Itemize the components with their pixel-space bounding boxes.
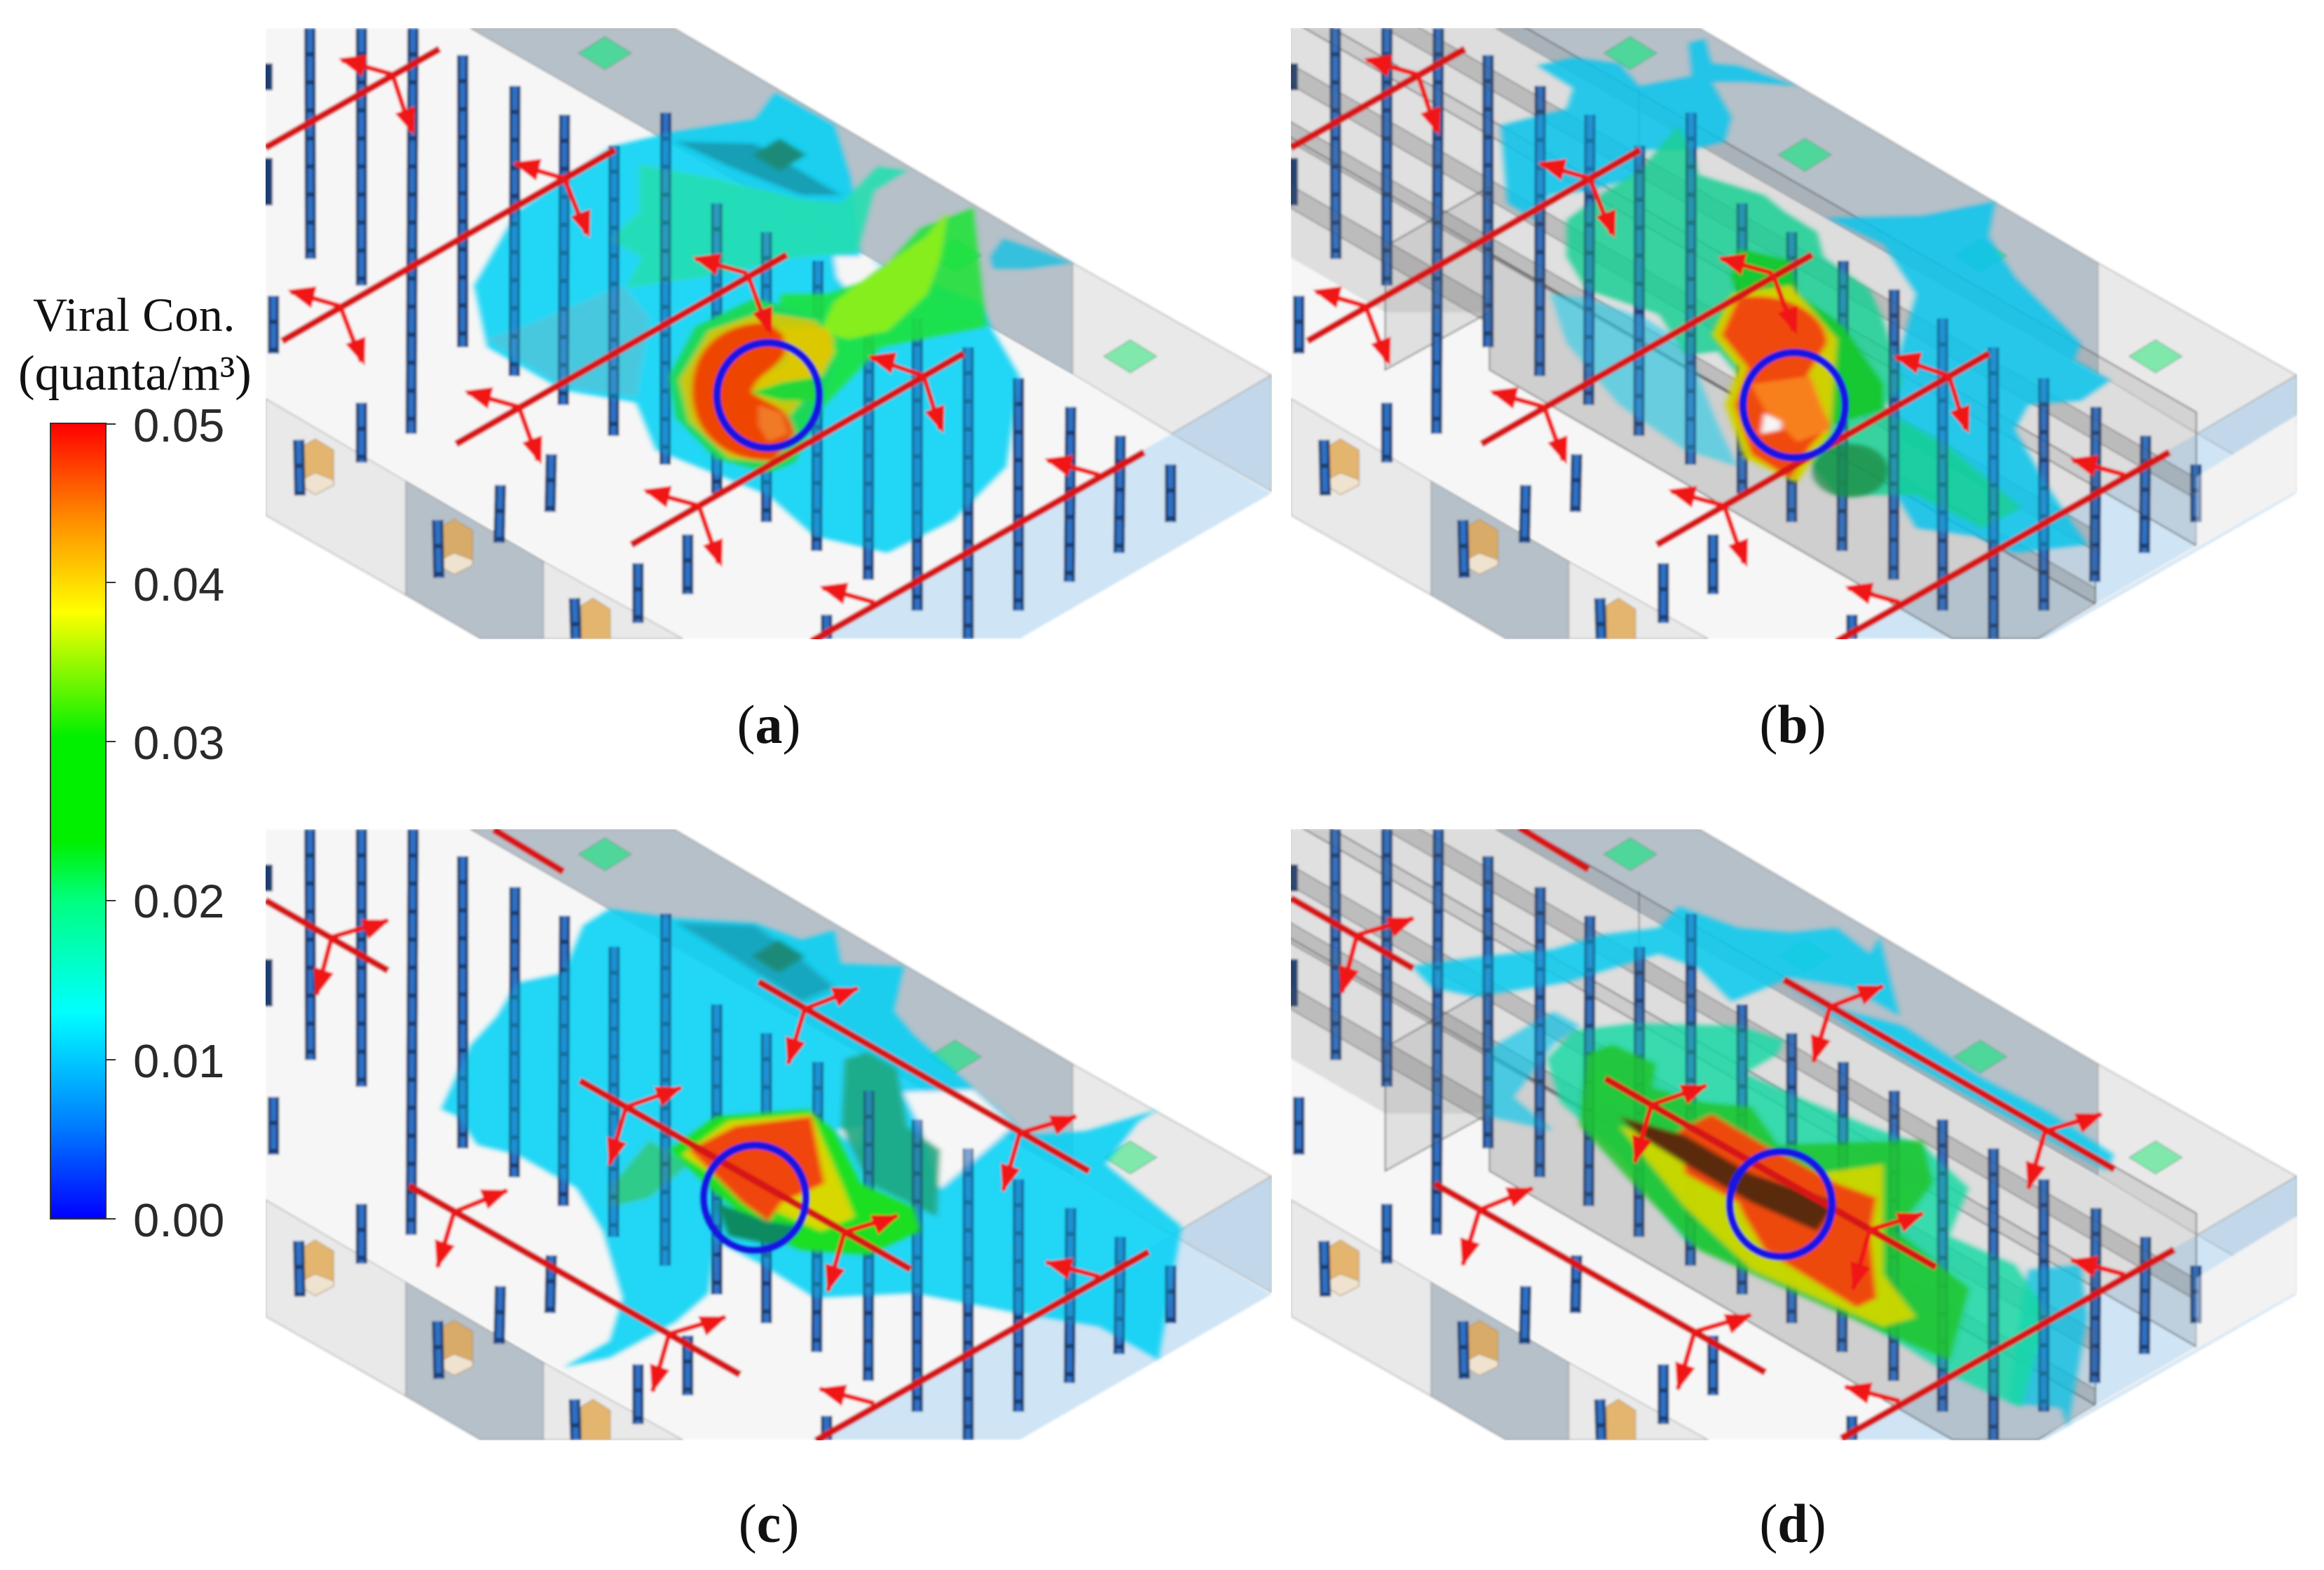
- green surface: [1731, 249, 1883, 425]
- cyan lower left: [1487, 1011, 1580, 1131]
- room floor: [266, 29, 1172, 639]
- floor hole large: [904, 1090, 1013, 1188]
- occupant blue core: [273, 29, 1170, 639]
- panel label d: (d): [1759, 1493, 1826, 1554]
- tick labels: 0.04: [133, 559, 224, 611]
- dark upper shade: [676, 142, 841, 195]
- viral plume b outer surfaces: [1501, 39, 2111, 553]
- occupants: [267, 29, 1170, 639]
- room model b: [1291, 29, 2297, 639]
- front partition: [1489, 254, 2096, 639]
- green surface: [755, 207, 987, 409]
- occupants b: [1292, 29, 2196, 639]
- middle partition: [1290, 4, 2096, 604]
- tick labels: 0.00: [133, 1194, 224, 1247]
- dark teal under core: [716, 1203, 802, 1245]
- room model: floor, walls, vents and boxes: [266, 29, 1271, 639]
- yellow ring: [683, 1114, 854, 1231]
- viral plume c core: [669, 1110, 920, 1255]
- viral plume b core: [1711, 249, 1888, 498]
- cyan left strip: [1412, 906, 1899, 1016]
- lower wall section one: [266, 399, 406, 595]
- tick marks: [106, 424, 116, 1219]
- source marker circle b: [1743, 353, 1845, 458]
- supply lines: [266, 49, 1144, 641]
- green ring: [669, 1110, 920, 1255]
- rear partition end line: [1639, 90, 1640, 224]
- occupants seen through plume a: [267, 29, 1170, 639]
- tick labels: [133, 400, 224, 1247]
- viral plume d outer surfaces: [1412, 906, 2114, 1427]
- viral plume c outer surfaces: [441, 908, 1182, 1367]
- core highlight: [758, 405, 788, 442]
- dark band: [1619, 1117, 1837, 1231]
- legend title: [18, 288, 252, 401]
- colour bar: [50, 423, 106, 1219]
- tick labels: 0.02: [133, 875, 224, 928]
- room model c: [266, 830, 1271, 1440]
- cyan right surface: [1827, 201, 2111, 553]
- lower wall section two: [406, 481, 543, 639]
- source marker circle d: [1730, 1152, 1832, 1257]
- upper wall band: [471, 29, 1073, 374]
- partition end cap: [1385, 187, 1489, 370]
- upper wall light section: [1073, 263, 1271, 434]
- red core: [689, 1117, 825, 1222]
- room model d: [1291, 830, 2297, 1440]
- right floor cover: [2038, 415, 2297, 639]
- tick labels: 0.01: [133, 1035, 224, 1088]
- source marker circle a: [717, 343, 819, 448]
- arrow stems: [291, 60, 1099, 602]
- cyan iso-surface: [474, 93, 1020, 553]
- right wall section: [1172, 375, 1271, 491]
- gray lower shade: [487, 285, 649, 397]
- outer green ring around source: [669, 298, 835, 473]
- cyan upper surface: [1501, 39, 1798, 220]
- dark vent seen through plume: [753, 138, 806, 171]
- occupants seen through plume c: [267, 830, 1170, 1440]
- panel: scenario b: [1290, 0, 2297, 641]
- occupants c: [267, 830, 1170, 1440]
- panel: scenario a: [266, 29, 1271, 641]
- viral plume a outer surfaces: [474, 93, 1073, 553]
- yellow ring: [679, 313, 835, 463]
- tick labels: 0.05: [133, 400, 224, 452]
- dark vent seen through plume: [752, 939, 805, 973]
- red core: [1679, 1114, 1876, 1308]
- partitions b: [1290, 0, 2297, 639]
- occupant outlines: [267, 29, 1170, 639]
- red-orange core: [1721, 296, 1831, 479]
- teal left fin: [610, 1140, 689, 1207]
- orange lobe: [1751, 376, 1831, 442]
- panel: scenario d: [1290, 693, 2297, 1440]
- tick labels: 0.03: [133, 717, 224, 770]
- white gap: [1761, 413, 1781, 434]
- yellow surface: [1619, 1126, 1916, 1327]
- dark top shade: [676, 923, 835, 1002]
- green inner tongue: [752, 376, 821, 401]
- occupants seen through plume b: [1292, 29, 2196, 639]
- panel label a: (a): [737, 694, 800, 755]
- viral plume d core: [1580, 1045, 1969, 1360]
- red core: [692, 322, 795, 460]
- panel label c: (c): [739, 1493, 799, 1554]
- green surface: [1580, 1045, 1969, 1360]
- teal surface: [1547, 1023, 2048, 1408]
- light blue floor area: [812, 434, 1271, 639]
- cyan right strip: [1784, 983, 2114, 1171]
- air supply lines and arrows d: [1291, 828, 2174, 1438]
- panel: scenario c: [266, 830, 1271, 1440]
- lower wall section three: [543, 561, 683, 639]
- occupants seen through plume d: [1292, 830, 2196, 1440]
- occupants d: [1292, 830, 2196, 1440]
- panel label b: (b): [1759, 694, 1826, 755]
- yellow core lobe: [755, 327, 835, 389]
- ceiling vents: [578, 36, 1156, 373]
- arrow stems: [317, 920, 1099, 1403]
- cyan iso-surface: [441, 908, 1182, 1367]
- colour legend: [18, 288, 252, 1247]
- left booth partition: [1290, 137, 1489, 313]
- arrow heads: [287, 55, 1074, 604]
- viral plume a core: [669, 207, 987, 473]
- rear partition: [1290, 0, 2196, 545]
- teal column: [841, 1052, 941, 1217]
- orange boxes: [303, 439, 610, 639]
- air supply lines and arrows c: [266, 830, 1149, 1440]
- legend title: Viral Con.: [33, 288, 235, 341]
- arrow heads: [314, 920, 1078, 1406]
- dark green blob: [1812, 444, 1888, 498]
- floor hole: [835, 257, 881, 294]
- teal surface: [1566, 125, 2022, 528]
- cyan right tip: [990, 238, 1073, 269]
- legend title: (quanta/m³): [18, 346, 252, 401]
- lime surface: [821, 212, 947, 339]
- supply lines: [266, 830, 1149, 1440]
- cyan lower left surface: [1550, 294, 1738, 467]
- air supply lines and arrows a: [266, 49, 1144, 641]
- teal surface: [610, 164, 908, 287]
- yellow rim: [1711, 285, 1837, 483]
- partition dark strips: [1290, 0, 2196, 604]
- cyan lower right: [2009, 1264, 2088, 1427]
- partitions d: [1290, 693, 2297, 1440]
- source marker circle c: [704, 1145, 806, 1250]
- floor hole small: [838, 1126, 864, 1150]
- air supply lines and arrows b: [1291, 49, 2170, 641]
